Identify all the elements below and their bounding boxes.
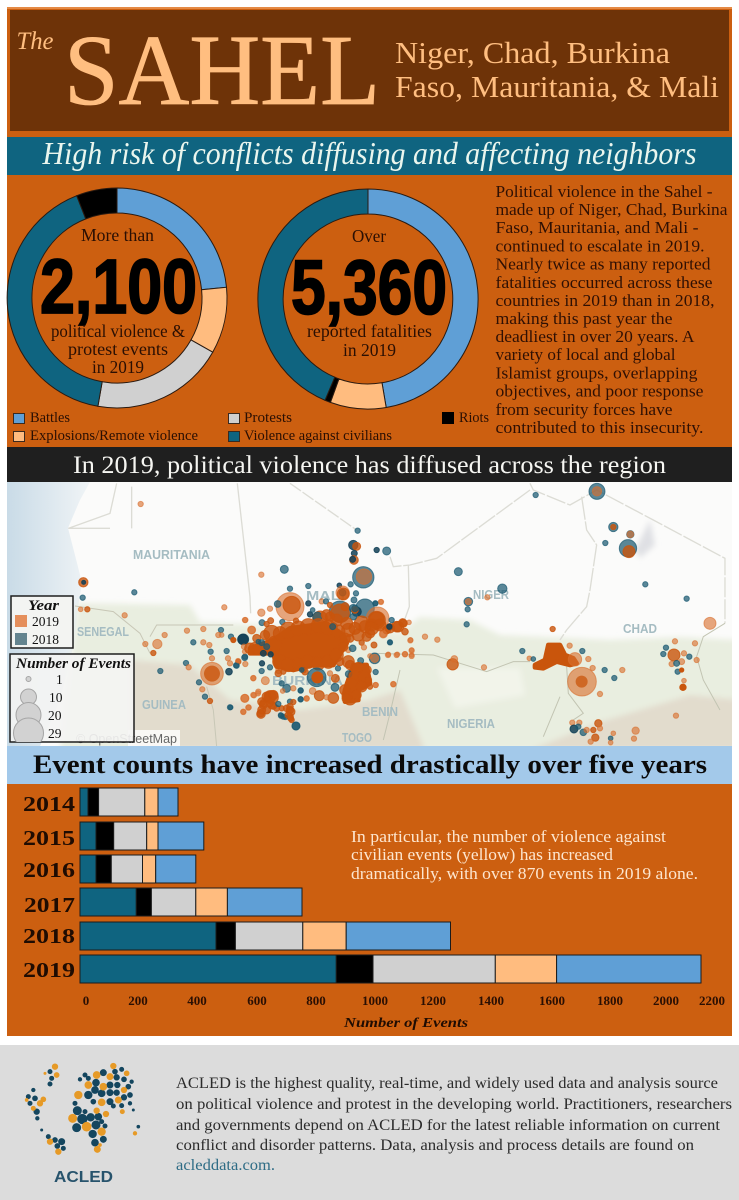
number of events legend: 1 [56, 672, 63, 687]
event type legend: Protests [244, 410, 292, 426]
footer [0, 1045, 739, 1200]
ACLED description [176, 1075, 732, 1174]
bar 2017 [24, 888, 302, 917]
chart note: In particular, the number of violence against [351, 827, 666, 846]
number of events legend: 10 [49, 690, 63, 705]
subtitle band: High risk of conflicts diffusing and affecting neighbors [42, 135, 696, 171]
map place labels: NIGERIA [447, 716, 496, 731]
summary paragraph: countries in 2019 than in 2018, [496, 291, 714, 310]
ACLED description: on political violence and protest in the developing world. Practitioners, researchers [176, 1096, 732, 1113]
x axis labels: 1800 [597, 993, 623, 1008]
panel: stacked bar chart [7, 784, 732, 1036]
summary paragraph: Political violence in the Sahel - [496, 182, 713, 201]
donut chart: fatalities [258, 189, 478, 409]
donut chart: events: in 2019 [92, 357, 144, 377]
map place labels: CHAD [623, 621, 657, 636]
map heading: In 2019, political violence has diffused across the region [73, 452, 667, 479]
donut chart: events: protest events [68, 339, 168, 359]
map place labels: SENEGAL [77, 624, 129, 639]
donut chart: events: political violence & [51, 321, 185, 341]
ACLED description: ACLED is the highest quality, real-time, and widely used data and analysis source [176, 1075, 718, 1092]
number of events legend [10, 654, 134, 748]
x axis labels: 2000 [653, 993, 679, 1008]
bar 2016 [23, 855, 196, 883]
eastern event markers [365, 483, 716, 745]
summary paragraph: Nearly twice as many reported [496, 254, 711, 274]
icon: ACLED dotted globe logo [25, 1063, 140, 1186]
x axis labels: 200 [128, 993, 148, 1008]
title banner: Niger, Chad, Burkina [395, 35, 670, 70]
number of events legend: 20 [48, 708, 62, 723]
number of events legend: Number of Events [15, 656, 131, 672]
donut chart: events: More than [81, 225, 154, 245]
event type legend: Violence against civilians [244, 428, 392, 444]
title banner: SAHEL [64, 14, 380, 126]
map place labels: GUINEA [142, 697, 187, 712]
map attribution: © OpenStreetMap [76, 731, 177, 746]
chart note: dramatically, with over 870 events in 2019 alone. [351, 864, 698, 883]
donut chart: fatalities: Over [352, 226, 386, 246]
donut chart: fatalities: in 2019 [343, 340, 396, 360]
donut chart: fatalities: 5,360 [291, 245, 447, 331]
chart heading: Event counts have increased drastically over five years [33, 750, 707, 779]
bar 2017: 2017 [24, 893, 75, 917]
ACLED description: and governments depend on ACLED for the latest reliable information on current [176, 1117, 721, 1134]
x axis labels: 600 [247, 993, 267, 1008]
x axis labels: 2200 [699, 993, 725, 1008]
year legend: 2018 [32, 633, 59, 648]
summary paragraph: fatalities occurred across these [496, 273, 712, 292]
map heading [7, 447, 732, 482]
map place labels: MALI [306, 588, 345, 603]
donut chart: events: 2,100 [40, 244, 197, 330]
summary paragraph: made up of Niger, Chad, Burkina [496, 200, 728, 219]
chart note: civilian events (yellow) has increased [351, 845, 613, 864]
summary paragraph: objectives, and poor response [496, 382, 704, 400]
western event markers [78, 501, 374, 730]
chart note [351, 827, 698, 883]
summary paragraph: making this past year the [496, 309, 672, 328]
event type legend: Explosions/Remote violence [30, 428, 198, 444]
summary paragraph: continued to escalate in 2019. [496, 236, 704, 256]
year legend: 2019 [32, 615, 59, 630]
panel: summary statistics [7, 175, 732, 447]
map place labels [77, 547, 657, 745]
title banner [7, 7, 732, 137]
x axis labels [83, 993, 725, 1008]
summary paragraph: contributed to this insecurity. [496, 418, 704, 437]
x axis labels: 1600 [539, 993, 565, 1008]
title banner: The [16, 28, 54, 55]
x axis labels: 1000 [362, 993, 388, 1008]
bar 2019 [23, 955, 701, 983]
year legend: Year [28, 598, 59, 614]
x axis labels: 800 [306, 993, 326, 1008]
number of events legend: 29 [48, 726, 62, 741]
map place labels: BENIN [362, 704, 398, 719]
x axis labels: 1200 [420, 993, 446, 1008]
map place labels: BURKINA [272, 673, 344, 688]
bar 2014: 2014 [23, 792, 76, 816]
summary paragraph: variety of local and global [496, 345, 676, 364]
event type legend: Riots [459, 410, 489, 426]
summary paragraph: Islamist groups, overlapping [496, 364, 698, 382]
bar 2014 [23, 788, 178, 816]
bar 2015: 2015 [23, 826, 75, 850]
x axis labels: 0 [83, 993, 89, 1008]
donut chart: events [7, 188, 227, 408]
icon: ACLED dotted globe logo: ACLED [54, 1169, 113, 1186]
ACLED description: conflict and disorder patterns. Data, analysis and process details are found on [176, 1137, 694, 1154]
map of events [7, 482, 739, 750]
summary paragraph: Faso, Mauritania, and Mali - [496, 218, 699, 237]
bar 2016: 2016 [23, 858, 75, 882]
map place labels: MAURITANIA [133, 547, 211, 562]
bar 2018 [23, 922, 450, 950]
x axis title: Number of Events [343, 1016, 469, 1031]
map place labels: TOGO [342, 730, 372, 745]
title banner: Faso, Mauritania, & Mali [395, 69, 719, 104]
donut chart: fatalities: reported fatalities [307, 321, 432, 341]
year legend [11, 596, 73, 648]
summary paragraph: deadliest in over 20 years. A [496, 327, 695, 346]
ACLED description: acleddata.com. [176, 1157, 275, 1174]
bar 2018: 2018 [23, 924, 75, 948]
map place labels: NIGER [473, 587, 510, 602]
summary paragraph: from security forces have [496, 400, 672, 419]
x axis labels: 400 [187, 993, 207, 1008]
x axis labels: 1400 [478, 993, 504, 1008]
summary paragraph [496, 182, 728, 437]
central event markers [228, 588, 414, 730]
chart heading [7, 746, 732, 784]
event type legend [14, 410, 489, 444]
event type legend: Battles [30, 410, 70, 426]
bar 2015 [23, 822, 204, 850]
bar 2019: 2019 [23, 958, 75, 982]
